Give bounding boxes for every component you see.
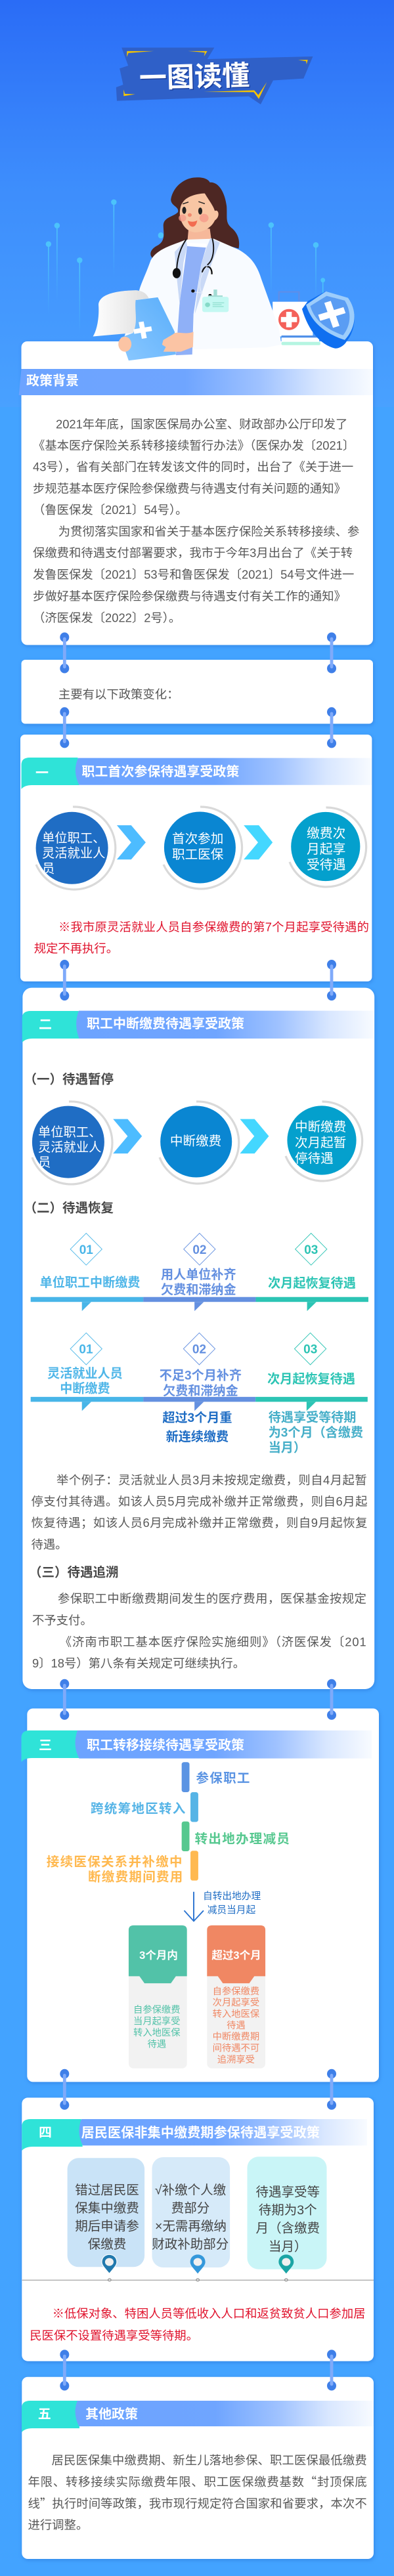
card: over three months: 追溯享受 <box>217 2054 255 2065</box>
card: over three months: 待遇 <box>227 2020 246 2031</box>
process: transfer steps: 转出地办理减员 <box>195 1832 290 1847</box>
process: transfer steps: 断缴费期间费用 <box>88 1870 184 1885</box>
card: missed enrollment: 保集中缴费 <box>75 2201 139 2216</box>
heading: section two: 职工中断缴费待遇享受政策 <box>87 1016 244 1031</box>
flow step: employee: 灵活就业人 <box>42 846 105 861</box>
panel: section two <box>22 988 374 1689</box>
panel: section one <box>20 735 372 981</box>
flow step: first enrollment: 职工医保 <box>172 848 224 862</box>
flow step: employee: 员 <box>38 1156 51 1170</box>
card: over three months: 自参保缴费 <box>213 1986 259 1997</box>
text block: other policies: 进行调整。 <box>28 2518 88 2532</box>
flow step: first enrollment: 首次参加 <box>172 832 223 846</box>
subheading: benefit recovery: （二）待遇恢复 <box>24 1201 114 1216</box>
callout: section four note <box>30 2307 366 2342</box>
title banner: 一图读懂 <box>139 60 250 94</box>
arrow: chevron one <box>113 1119 142 1153</box>
heading: section three: 三 <box>39 1738 52 1753</box>
timeline: employee recovery: 用人单位补齐 <box>161 1267 236 1282</box>
text block: policy background body: 保缴费和待遇支付部署要求，我市于今年3月出台了《关于转 <box>33 546 353 560</box>
card: payment items: 财政补助部分 <box>152 2237 229 2252</box>
callout: section one note: ※我市原灵活就业人员自参保缴费的第7个月起享受待遇的 <box>58 920 369 934</box>
text block: retroactivity: 9〕18号）第八条有关规定可继续执行。 <box>32 1656 245 1670</box>
process: transfer steps <box>47 1762 290 1885</box>
arrow: chevron one <box>117 825 146 859</box>
card: payment items: 费部分 <box>171 2201 209 2216</box>
flow step: employee: 单位职工、 <box>38 1125 101 1140</box>
text block: other policies: 线”执行时间等政策，我市现行规定符合国家和省要求，本次不 <box>28 2495 367 2512</box>
text block: policy background body: 步做好基本医疗保险参保缴费与待遇支付有关工作的通知》 <box>33 590 346 603</box>
text block: policy background body: 发鲁医保发〔2021〕53号和鲁医保发〔2021〕54号文件进一 <box>33 568 354 582</box>
arrow: chevron two <box>244 825 273 859</box>
heading: section one: 一 <box>35 766 49 781</box>
timeline: flexible worker recovery: 不足3个月补齐 <box>160 1368 242 1383</box>
flow step: benefit start <box>290 807 366 887</box>
arrow: chevron two <box>240 1119 269 1153</box>
callout: section four note: ※低保对象、特困人员等低收入人口和返贫致贫人口参加居 <box>53 2307 366 2321</box>
text block: policy background body: 《基本医疗保险关系转移接续暂行办法》（医保办发〔2021〕 <box>33 439 355 452</box>
flow step: first enrollment <box>164 807 242 889</box>
flow step: payment interruption: 中断缴费 <box>170 1134 221 1148</box>
illustration: doctor with medical kit and shield <box>93 177 355 360</box>
heading: section five: 其他政策 <box>85 2407 138 2422</box>
card: waiting period: 月（含缴费 <box>255 2222 320 2236</box>
timeline: flexible worker recovery: 当月） <box>269 1440 306 1455</box>
process: transfer steps: 接续医保关系并补缴中 <box>47 1854 183 1869</box>
heading: section one <box>21 758 372 789</box>
heading: section five <box>22 2401 374 2432</box>
heading: section two <box>22 1011 374 1042</box>
subheading: benefit retroactivity: （三）待遇追溯 <box>29 1564 119 1579</box>
timeline: flexible worker recovery: 新连续缴费 <box>166 1430 229 1444</box>
card: within three months: 当月起享受 <box>133 2016 181 2027</box>
card: within three months: 转入地医保 <box>133 2027 181 2038</box>
connector: section one to two <box>60 960 336 1000</box>
text block: retroactivity <box>32 1592 366 1670</box>
connector: section four to five <box>60 2350 336 2391</box>
text block: retroactivity: 《济南市职工基本医疗保险实施细则》（济医保发〔201 <box>60 1635 366 1648</box>
flow step: employee: 单位职工、 <box>42 831 105 846</box>
icon: clipboard with paper <box>93 290 194 360</box>
heading: section four <box>22 2119 367 2151</box>
flow step: benefit start: 受待遇 <box>307 858 345 872</box>
flow step: employee <box>36 807 116 890</box>
card: over three months: 转入地医保 <box>213 2009 260 2020</box>
heading: policy background: 政策背景 <box>26 373 79 389</box>
icon: shield <box>302 291 355 349</box>
title banner: 一图读懂 <box>140 61 251 95</box>
card: missed enrollment: 保缴费 <box>88 2237 126 2252</box>
card: over three months: 中断缴费期 <box>213 2031 259 2042</box>
card: missed enrollment <box>68 2158 144 2267</box>
card: within three months: 自参保缴费 <box>133 2004 181 2015</box>
icon: medical kit <box>273 292 320 345</box>
timeline: flexible worker recovery: 中断缴费 <box>60 1381 110 1396</box>
timeline: flexible worker recovery: 灵活就业人员 <box>47 1366 123 1381</box>
flow step: benefit paused: 次月起暂 <box>295 1136 346 1150</box>
card: waiting period <box>247 2157 327 2269</box>
card: waiting period: 当月） <box>269 2240 307 2254</box>
heading: section four: 四 <box>39 2126 52 2140</box>
text block: intro: 主要有以下政策变化： <box>58 687 179 701</box>
text block: other policies <box>28 2453 367 2532</box>
card: payment items: √补缴个人缴 <box>155 2183 226 2197</box>
timeline: employee recovery: 01 <box>79 1243 93 1257</box>
icon: id badge <box>202 290 229 312</box>
flow step: employee: 灵活就业人 <box>38 1140 101 1155</box>
timeline: flexible worker recovery: 次月起恢复待遇 <box>267 1372 355 1386</box>
text block: other policies: 年限、转移接续实际缴费年限、职工医保缴费基数“封顶保底 <box>28 2473 367 2490</box>
text block: retroactivity: 不予支付。 <box>32 1614 93 1627</box>
card: waiting period: 待期为3个 <box>259 2203 317 2218</box>
timeline: flexible worker recovery: 待遇享受等待期 <box>269 1410 356 1425</box>
callout: section one note <box>34 920 369 955</box>
card: within three months <box>129 1925 187 2069</box>
text block: other policies: 居民医保集中缴费期、新生儿落地参保、职工医保最低缴费 <box>51 2453 367 2467</box>
heading: policy background <box>19 369 373 395</box>
panel: section three <box>21 1708 379 2082</box>
text block: example: 待遇。 <box>32 1537 68 1551</box>
text block: example <box>32 1473 368 1551</box>
connector: policy background to intro <box>60 632 336 674</box>
text block: policy background body: 43号），省有关部门在转发该文件的同时，出台了《关于进一 <box>33 460 353 474</box>
flow step: benefit paused: 停待遇 <box>295 1151 334 1166</box>
title banner <box>116 47 313 104</box>
timeline: flexible worker recovery: 01 <box>79 1343 93 1357</box>
timeline: employee recovery: 次月起恢复待遇 <box>268 1276 356 1291</box>
heading: section one: 职工首次参保待遇享受政策 <box>81 763 239 779</box>
card: over three months: 次月起享受 <box>213 1997 259 2008</box>
callout: section one note: 规定不再执行。 <box>34 941 118 955</box>
panel: main changes intro <box>21 660 373 723</box>
heading: section four: 居民医保非集中缴费期参保待遇享受政策 <box>81 2124 320 2140</box>
subheading: benefit suspension: （一）待遇暂停 <box>24 1073 114 1087</box>
flow step: employee: 员 <box>42 862 55 876</box>
text block: policy background body: （鲁医保发〔2021〕54号）。 <box>33 503 187 517</box>
arrow: down with note <box>184 1891 261 1921</box>
decorative circuit lines <box>46 200 325 333</box>
panel: policy background <box>19 341 373 645</box>
text block: example: 举个例子：灵活就业人员3月未按规定缴费，则自4月起暂 <box>56 1473 367 1487</box>
heading: section three: 职工转移接续待遇享受政策 <box>87 1738 244 1753</box>
text block: example: 恢复待遇；如该人员6月完成补缴并正常缴费，则自9月起恢复 <box>32 1516 368 1530</box>
flow step: benefit paused: 中断缴费 <box>295 1120 346 1134</box>
timeline: employee recovery: 欠费和滞纳金 <box>161 1282 236 1297</box>
process: transfer steps: 跨统筹地区转入 <box>91 1801 186 1816</box>
heading: section three <box>21 1730 372 1762</box>
flow step: employee <box>32 1102 112 1184</box>
text block: example: 停支付其待遇。如该人员5月完成补缴并正常缴费，则自6月起 <box>32 1494 368 1508</box>
timeline: flexible worker recovery <box>31 1333 368 1455</box>
timeline: flexible worker recovery: 03 <box>303 1343 317 1357</box>
flow: benefit suspension circles <box>32 1102 362 1184</box>
timeline: employee recovery: 02 <box>192 1243 206 1257</box>
card: over three months: 超过3个月 <box>211 1949 261 1962</box>
timeline: employee recovery: 单位职工中断缴费 <box>40 1275 140 1290</box>
card: missed enrollment: 错过居民医 <box>75 2183 139 2197</box>
timeline: flexible worker recovery: 超过3个月重 <box>162 1411 232 1425</box>
text block: retroactivity: 参保职工中断缴费期间发生的医疗费用，医保基金按规定 <box>58 1592 366 1606</box>
text block: policy background body: （济医保发〔2022〕2号）。 <box>33 611 181 624</box>
flow: section one circles <box>36 807 366 890</box>
arrow: down with note: 减员当月起 <box>208 1904 255 1916</box>
text block: policy background body: 2021年年底，国家医保局办公室、财政部办公厅印发了 <box>56 417 347 431</box>
card: missed enrollment: 期后申请参 <box>75 2219 139 2233</box>
connector: section three to four <box>60 2069 336 2110</box>
timeline: flexible worker recovery: 02 <box>192 1343 206 1357</box>
card: payment items <box>152 2157 230 2267</box>
card: payment items: ×无需再缴纳 <box>155 2219 227 2233</box>
card: within three months: 3个月内 <box>139 1949 178 1962</box>
timeline: employee recovery: 03 <box>304 1243 318 1257</box>
flow step: benefit start: 月起享 <box>307 842 345 857</box>
connector: section two to three <box>60 1679 336 1720</box>
heading: section two: 二 <box>39 1018 52 1032</box>
timeline: flexible worker recovery: 为3个月（含缴费 <box>269 1425 363 1440</box>
connector: intro to section one <box>60 707 336 748</box>
timeline: flexible worker recovery: 欠费和滞纳金 <box>163 1383 238 1398</box>
card: waiting period: 待遇享受等 <box>255 2185 320 2200</box>
doctor figure <box>121 177 282 355</box>
flow step: payment interruption <box>160 1102 239 1184</box>
text block: policy background body <box>33 417 359 624</box>
heading: section five: 五 <box>38 2407 51 2422</box>
flow step: benefit start: 缴费次 <box>307 826 345 841</box>
panel: section five <box>22 2377 374 2559</box>
card: over three months <box>207 1925 265 2069</box>
card: over three months: 间待遇不可 <box>213 2043 259 2054</box>
arrow: down with note: 自转出地办理 <box>203 1891 261 1902</box>
text block: policy background body: 为贯彻落实国家和省关于基本医疗保险关系转移接续、参 <box>58 525 359 538</box>
flow step: benefit paused <box>286 1102 362 1181</box>
text block: policy background body: 步规范基本医疗保险参保缴费与待遇支付有关问题的通知》 <box>33 482 346 496</box>
timeline with location pins <box>22 2254 374 2281</box>
panel: section four <box>22 2097 374 2361</box>
header gradient background <box>0 0 394 407</box>
timeline: employee recovery <box>31 1234 368 1311</box>
card: within three months: 待遇 <box>148 2039 166 2050</box>
callout: section four note: 民医保不设置待遇享受等待期。 <box>30 2329 198 2342</box>
process: transfer steps: 参保职工 <box>196 1771 251 1786</box>
